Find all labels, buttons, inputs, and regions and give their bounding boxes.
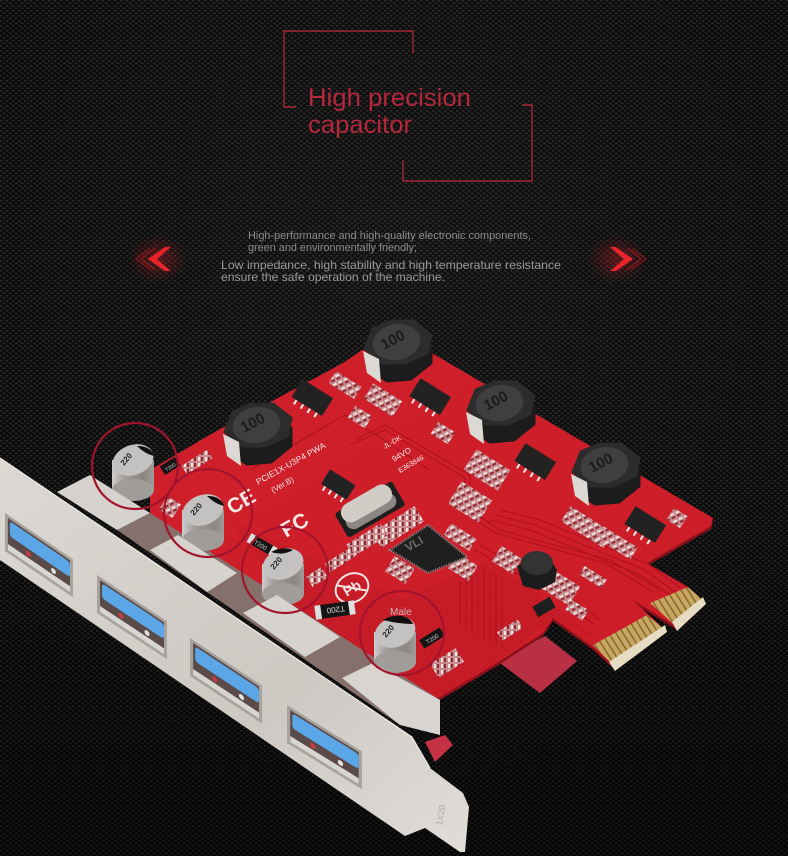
card: hatch area <box>230 520 600 697</box>
gold fingers: short <box>650 587 705 627</box>
title: capacitor <box>308 111 412 139</box>
VLI controller chip: VLI <box>402 533 426 555</box>
description text: High-performance and high-quality electronic components, <box>248 230 531 242</box>
title: High precision <box>308 84 471 112</box>
chip resistor right <box>419 627 445 649</box>
description text: ensure the safe operation of the machine. <box>221 270 445 284</box>
description text: green and environmentally friendly; <box>248 242 417 254</box>
inductor 1 <box>363 320 431 383</box>
small IC 6 <box>532 597 556 617</box>
PCIe card <box>0 320 713 852</box>
bracket flange tab 3 <box>243 595 340 657</box>
capacitor 2: 220 <box>189 501 204 517</box>
USB port 1 <box>5 513 73 597</box>
gold fingers: cream lip short <box>672 597 706 631</box>
USB port 4 <box>287 705 362 789</box>
small IC 2 <box>407 378 451 419</box>
card: silkscreen labels <box>254 435 425 495</box>
card: bracket tab red <box>497 636 577 693</box>
crystal <box>333 478 406 538</box>
bracket top highlight <box>0 458 430 768</box>
capacitor 4: 220 <box>381 623 396 639</box>
icon: CE mark: CE <box>223 485 260 519</box>
inductor 2: 100 <box>481 388 511 415</box>
card: silkscreen labels: E363846 <box>398 455 425 475</box>
card: board edge <box>150 353 713 708</box>
bracket red stub <box>425 735 453 762</box>
inductor 2 <box>466 381 534 444</box>
highlight circle 4 <box>360 591 444 675</box>
inductor 4 <box>223 403 291 466</box>
bracket flange tab 1 <box>57 475 150 530</box>
bracket flange strip <box>117 513 440 725</box>
small IC 1 <box>289 379 333 420</box>
chip resistor right: T200 <box>426 633 441 646</box>
bracket embossed mark: 1X28 <box>434 804 448 826</box>
card: silkscreen labels: PCIE1X-U3P4 PWA <box>254 440 327 487</box>
capacitor 4 <box>370 611 420 673</box>
card: silkscreen labels: JL-DK <box>382 435 403 451</box>
capacitor 2 <box>178 489 228 551</box>
chip resistor T200 small <box>247 533 277 557</box>
icon: FCC mark: FC <box>277 508 313 542</box>
bracket front plate <box>0 458 469 852</box>
card: silkscreen labels: (Ver.B) <box>270 475 296 495</box>
capacitor 3: 220 <box>269 555 284 571</box>
inductor 4: 100 <box>238 410 268 437</box>
USB port 2 <box>97 575 167 659</box>
chip resistor T200 small: T200 <box>253 540 268 552</box>
icon: Pb free mark <box>330 567 374 609</box>
small IC 5 <box>318 469 355 504</box>
USB port 3 <box>190 638 262 724</box>
icon: left chevrons <box>128 235 188 283</box>
chip resistor T200: T200 <box>326 604 345 615</box>
capacitor 3 <box>258 543 308 605</box>
chip resistor T200 <box>314 600 356 620</box>
card: component clusters <box>159 371 687 678</box>
capacitor 1 <box>108 439 158 501</box>
highlight circle 2 <box>164 469 252 557</box>
VLI controller chip <box>390 525 467 573</box>
title <box>308 84 471 139</box>
chip resistor top-left <box>160 457 180 475</box>
inductor 3: 100 <box>586 450 616 477</box>
card: pcb <box>150 350 713 705</box>
card: traces <box>250 415 680 648</box>
inductor 3 <box>571 443 639 506</box>
card: silkscreen labels: 94VO <box>390 446 413 464</box>
gold fingers: cream lip long <box>609 625 667 671</box>
highlight circle 1 <box>92 423 178 509</box>
description text: Low impedance, high stability and high temperature resistance <box>221 258 561 272</box>
description text <box>221 230 561 284</box>
title frame: bottom-right bracket <box>403 105 532 181</box>
small IC 3 <box>512 443 556 484</box>
title frame: top-left bracket <box>284 31 413 107</box>
icon: Pb free mark: Pb <box>340 577 364 599</box>
Male label: Male <box>390 607 412 618</box>
small IC 4 <box>622 506 666 547</box>
gold fingers: long <box>593 615 665 667</box>
inductor 1: 100 <box>378 327 408 354</box>
bracket flange tab 2 <box>150 535 237 592</box>
chip resistor top-left: T200 <box>164 462 177 473</box>
capacitor 1: 220 <box>119 451 134 467</box>
highlight circle 3 <box>242 527 328 613</box>
icon: right chevrons <box>587 235 647 283</box>
bracket flange tab 4 <box>342 663 440 735</box>
small inductor <box>517 551 557 590</box>
